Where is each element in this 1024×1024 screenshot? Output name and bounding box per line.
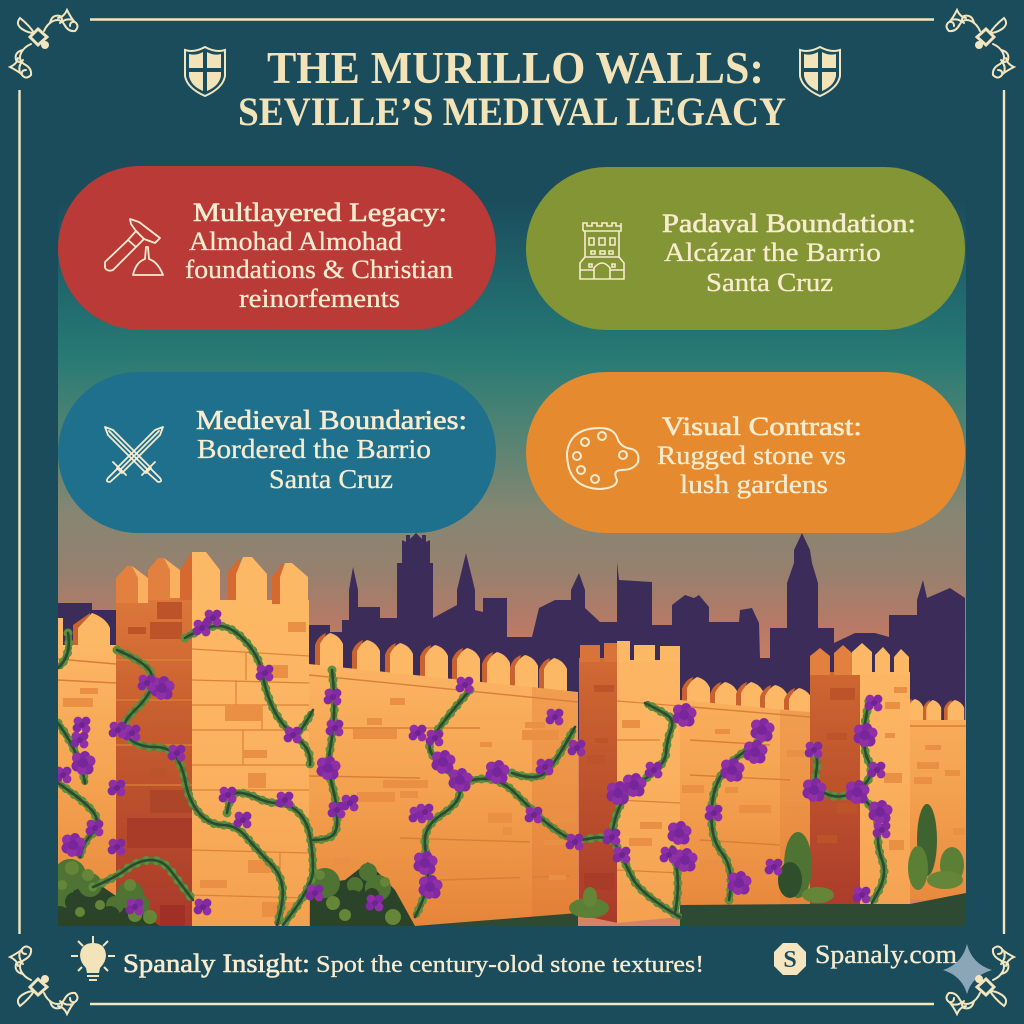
text: Multilayered Legacy copy: Multlayered Legacy: bbox=[193, 198, 447, 227]
icon: crossed swords bbox=[105, 427, 163, 482]
left tower bbox=[116, 552, 309, 926]
illustration: sunset sky bbox=[58, 200, 966, 926]
illustration: climbing vines bbox=[58, 626, 884, 925]
title: SEVILLE’S MEDIVAL LEGACY bbox=[238, 89, 786, 134]
icon: hammer and chisel bbox=[105, 219, 163, 275]
footer insight text: Spanaly Insight: bbox=[123, 949, 310, 978]
text: Visual Contrast copy: Rugged stone vs bbox=[657, 441, 846, 470]
text: Padaval Boundation copy bbox=[662, 209, 916, 297]
illustration: shrubs and cypresses bbox=[46, 804, 964, 926]
illustration: ground bbox=[415, 893, 966, 926]
brand name: Spanaly.com bbox=[815, 940, 957, 969]
text: Multilayered Legacy copy bbox=[185, 198, 453, 313]
illustration panel bbox=[46, 200, 966, 926]
corner ornament over star bbox=[946, 946, 1014, 1014]
text: Medieval Boundaries copy bbox=[196, 405, 467, 494]
text: Multilayered Legacy copy: reinorfements bbox=[239, 284, 400, 313]
icon: castle tower bbox=[580, 223, 624, 279]
text: Padaval Boundation copy: Padaval Boundation: bbox=[662, 209, 916, 238]
right tower bbox=[810, 643, 910, 905]
right wall sections bbox=[680, 677, 966, 905]
text: Medieval Boundaries copy: Bordered the Barrio bbox=[197, 434, 431, 464]
text: Visual Contrast copy: Visual Contrast: bbox=[662, 412, 862, 441]
text: Padaval Boundation copy: Alcázar the Barrio bbox=[664, 238, 881, 267]
icon: four-point star bbox=[943, 944, 992, 994]
icon: right shield bbox=[800, 47, 840, 96]
text: Multilayered Legacy copy: Almohad Almohad bbox=[189, 227, 402, 256]
panel: Multilayered Legacy bbox=[58, 166, 496, 330]
panel: Padaval Boundation bbox=[526, 167, 965, 330]
icon: painter palette bbox=[567, 428, 638, 489]
illustration: fortified walls bbox=[58, 552, 966, 926]
main wall section with merlons bbox=[309, 633, 578, 926]
text: Visual Contrast copy: lush gardens bbox=[680, 470, 828, 499]
text: Padaval Boundation copy: Santa Cruz bbox=[706, 268, 833, 297]
title bbox=[238, 42, 786, 134]
text: Visual Contrast copy bbox=[657, 412, 862, 499]
panel: Medieval Boundaries bbox=[58, 372, 496, 533]
title: THE MURILLO WALLS: bbox=[267, 42, 764, 93]
icon: Spanaly logo badge: S bbox=[783, 947, 797, 973]
far-left wall bbox=[58, 613, 116, 926]
footer insight text bbox=[123, 949, 704, 978]
text: Multilayered Legacy copy: foundations & Christian bbox=[185, 255, 453, 284]
text: Medieval Boundaries copy: Medieval Boundaries: bbox=[196, 405, 467, 435]
icon: Spanaly logo badge bbox=[774, 943, 806, 975]
middle tower bbox=[579, 641, 680, 923]
text: Medieval Boundaries copy: Santa Cruz bbox=[269, 464, 393, 494]
icon: lightbulb bbox=[71, 936, 115, 980]
icon: left shield bbox=[185, 47, 225, 96]
panel: Visual Contrast bbox=[526, 372, 965, 533]
illustration: Seville skyline silhouette bbox=[58, 533, 965, 740]
footer insight text: Spot the century-olod stone textures! bbox=[316, 952, 704, 978]
illustration: purple bougainvillea flowers bbox=[54, 610, 893, 915]
